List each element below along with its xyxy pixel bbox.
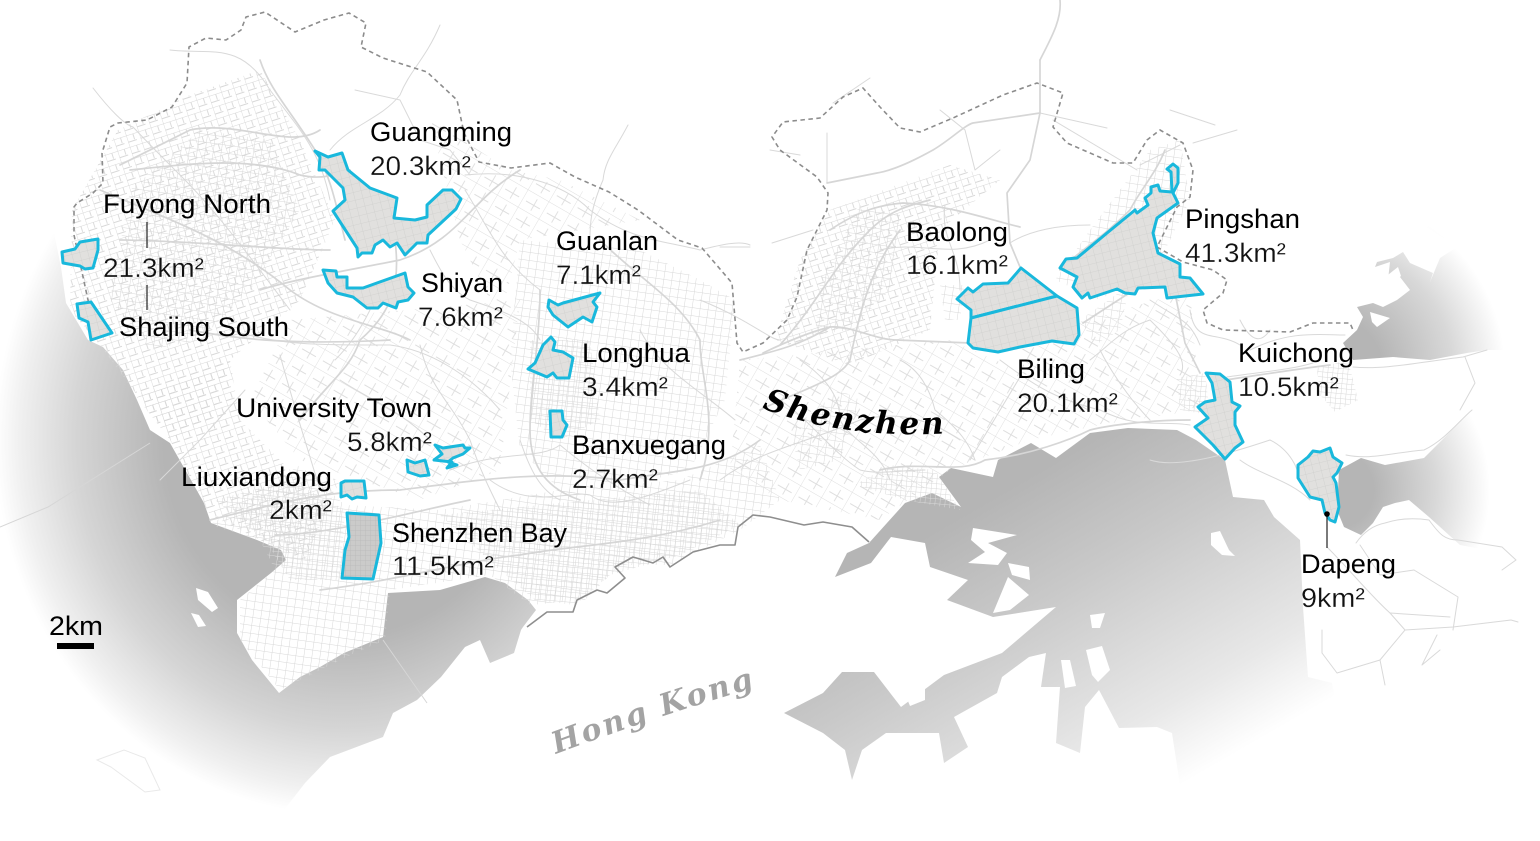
label: Shenzhen Bay: Shenzhen Bay — [392, 518, 567, 548]
label: Pingshan: Pingshan — [1185, 204, 1300, 234]
label: Dapeng: Dapeng — [1301, 549, 1396, 579]
zone: Guanlan — [548, 293, 600, 327]
label: Longhua: Longhua — [582, 338, 691, 368]
place name: Shenzhen: Shenzhen — [762, 390, 942, 435]
Shenzhen-Hong Kong border river — [527, 515, 869, 627]
label: Shiyan: 7.6km² — [418, 302, 503, 332]
label: Guangming: 20.3km² — [370, 151, 471, 181]
label: Baolong: Baolong — [906, 217, 1008, 247]
sea: Pearl River estuary and Shenzhen Bay — [0, 185, 536, 841]
minor roads — [93, 25, 1518, 685]
zone: Liuxiandong — [341, 481, 366, 499]
sea bridges — [0, 443, 427, 703]
label: Guanlan — [556, 226, 658, 290]
urban street grids — [70, 70, 1358, 690]
label: Longhua — [582, 338, 691, 402]
label: Banxuegang — [572, 430, 726, 494]
labels — [103, 117, 1396, 613]
label: Biling: 20.1km² — [1017, 388, 1118, 418]
scale bar: 2km: 2km — [49, 611, 103, 641]
label: Liuxiandong: 2km² — [269, 495, 332, 525]
zone: Shenzhen Bay — [342, 513, 381, 579]
zone: Kuichong — [1195, 373, 1243, 459]
zone: Guangming — [315, 151, 461, 257]
label: University Town — [236, 393, 432, 457]
label: Shenzhen Bay: 11.5km² — [392, 551, 494, 581]
development zones outlined in cyan — [62, 151, 1342, 579]
place name: Hong Kong: Hong Kong — [552, 674, 751, 754]
label: Longhua: 3.4km² — [582, 372, 668, 402]
label: Kuichong: 10.5km² — [1238, 372, 1339, 402]
label: Liuxiandong — [181, 462, 332, 525]
label: Kuichong: Kuichong — [1238, 338, 1354, 368]
label: Shajing South: Shajing South — [119, 312, 289, 342]
label: Biling — [1017, 354, 1118, 418]
zone: Dapeng — [1298, 448, 1342, 522]
label: Fuyong North — [103, 189, 271, 283]
label: Shenzhen Bay — [392, 518, 567, 581]
zone: Banxuegang — [550, 411, 567, 437]
label: Fuyong North: 21.3km² — [103, 253, 204, 283]
label: Baolong — [906, 217, 1008, 280]
sea: upper Daya Bay — [1343, 187, 1540, 360]
zone: Shiyan — [323, 270, 414, 308]
label: Baolong: 16.1km² — [906, 250, 1008, 280]
label: Fuyong North: Fuyong North — [103, 189, 271, 219]
text paths — [556, 408, 950, 754]
zone: Shajing South — [77, 302, 112, 340]
water: seas and bays — [0, 185, 1540, 841]
label: Shiyan — [418, 268, 503, 332]
label: Biling: Biling — [1017, 354, 1085, 384]
label: Dapeng: 9km² — [1301, 583, 1365, 613]
zone: Pingshan — [1060, 164, 1203, 298]
leader lines — [147, 222, 1330, 548]
label: Banxuegang: 2.7km² — [572, 464, 658, 494]
zone: Fuyong North — [62, 239, 98, 269]
label: Guangming — [370, 117, 512, 181]
label: Liuxiandong: Liuxiandong — [181, 462, 332, 492]
label: Banxuegang: Banxuegang — [572, 430, 726, 460]
label: Guangming: Guangming — [370, 117, 512, 147]
major roads — [100, 0, 1330, 590]
label: Kuichong — [1238, 338, 1354, 402]
label: Guanlan: Guanlan — [556, 226, 658, 256]
label: Dapeng — [1301, 549, 1396, 613]
zone: Longhua — [528, 337, 573, 378]
label: Guanlan: 7.1km² — [556, 260, 641, 290]
label: Pingshan: 41.3km² — [1185, 238, 1286, 268]
label: University Town: 5.8km² — [347, 427, 432, 457]
zone: University Town west — [407, 460, 429, 476]
zone: Baolong — [957, 268, 1057, 318]
label: University Town: University Town — [236, 393, 432, 423]
road network — [70, 0, 1518, 690]
label: Pingshan — [1185, 204, 1300, 268]
zone: University Town east — [434, 445, 470, 468]
dashed Shenzhen administrative boundary — [74, 12, 1353, 352]
sea: Dapeng Bay — [1337, 390, 1540, 560]
zone: Biling — [968, 296, 1079, 352]
label: Shiyan: Shiyan — [421, 268, 503, 298]
sea: Mirs Bay south of Shenzhen — [784, 428, 1337, 785]
islands — [97, 267, 1401, 792]
